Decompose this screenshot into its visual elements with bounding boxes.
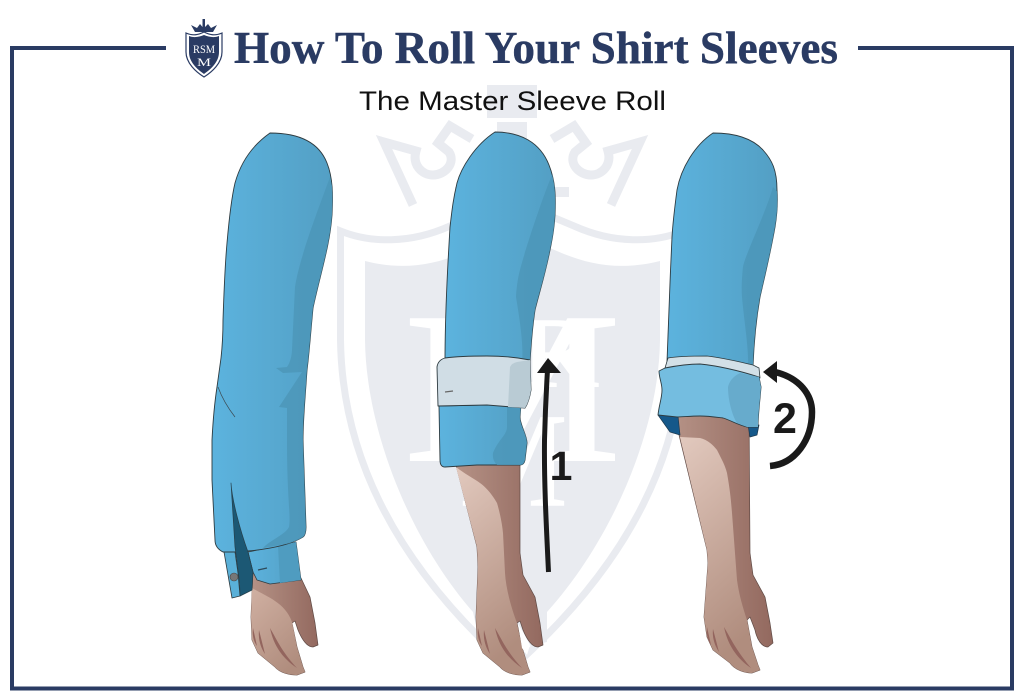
- buttonhole: [258, 568, 267, 570]
- upper sleeve: [445, 132, 555, 362]
- label 2: 2: [773, 395, 797, 443]
- rolled blue cuff: [658, 364, 761, 427]
- placket opening: [231, 483, 253, 596]
- illustration: arm with second fold: [658, 133, 785, 673]
- title: How To Roll Your Shirt Sleeves: [234, 23, 838, 73]
- illustration: arm with first fold: [437, 132, 565, 675]
- lower sleeve: [439, 404, 527, 467]
- sleeve: [212, 133, 332, 552]
- inner dark sleeve: [658, 415, 759, 437]
- sleeve shadow: [263, 177, 340, 548]
- cuff shadow: [508, 360, 531, 408]
- arrow 1: [537, 358, 561, 572]
- logo: [186, 19, 222, 77]
- forearm and hand: [456, 465, 543, 675]
- arrow 2: [763, 361, 812, 466]
- watermark: brand shield: [340, 85, 684, 668]
- crease: [218, 387, 235, 417]
- upper sleeve shadow: [742, 188, 778, 364]
- cuff shadow: [728, 373, 761, 427]
- cuff: [224, 542, 301, 598]
- rolled white cuff: [437, 356, 531, 408]
- illustration: arm with sleeve down: [212, 133, 340, 675]
- lower sleeve shadow: [493, 406, 527, 465]
- upper sleeve shadow: [516, 174, 556, 360]
- forearm and hand: [674, 405, 773, 673]
- watermark: brand shield: M: [404, 268, 621, 507]
- logo: M: [197, 55, 211, 69]
- label 1: 1: [550, 443, 572, 489]
- watermark: brand shield: R: [520, 297, 598, 408]
- white cuff band: [665, 356, 760, 378]
- subtitle: The Master Sleeve Roll: [359, 86, 666, 116]
- watermark: brand shield: M: [460, 386, 567, 534]
- cuff button: [230, 573, 238, 581]
- hand: [251, 570, 318, 675]
- upper sleeve: [667, 133, 777, 366]
- logo: RSM: [193, 42, 215, 56]
- buttonhole: [445, 391, 453, 392]
